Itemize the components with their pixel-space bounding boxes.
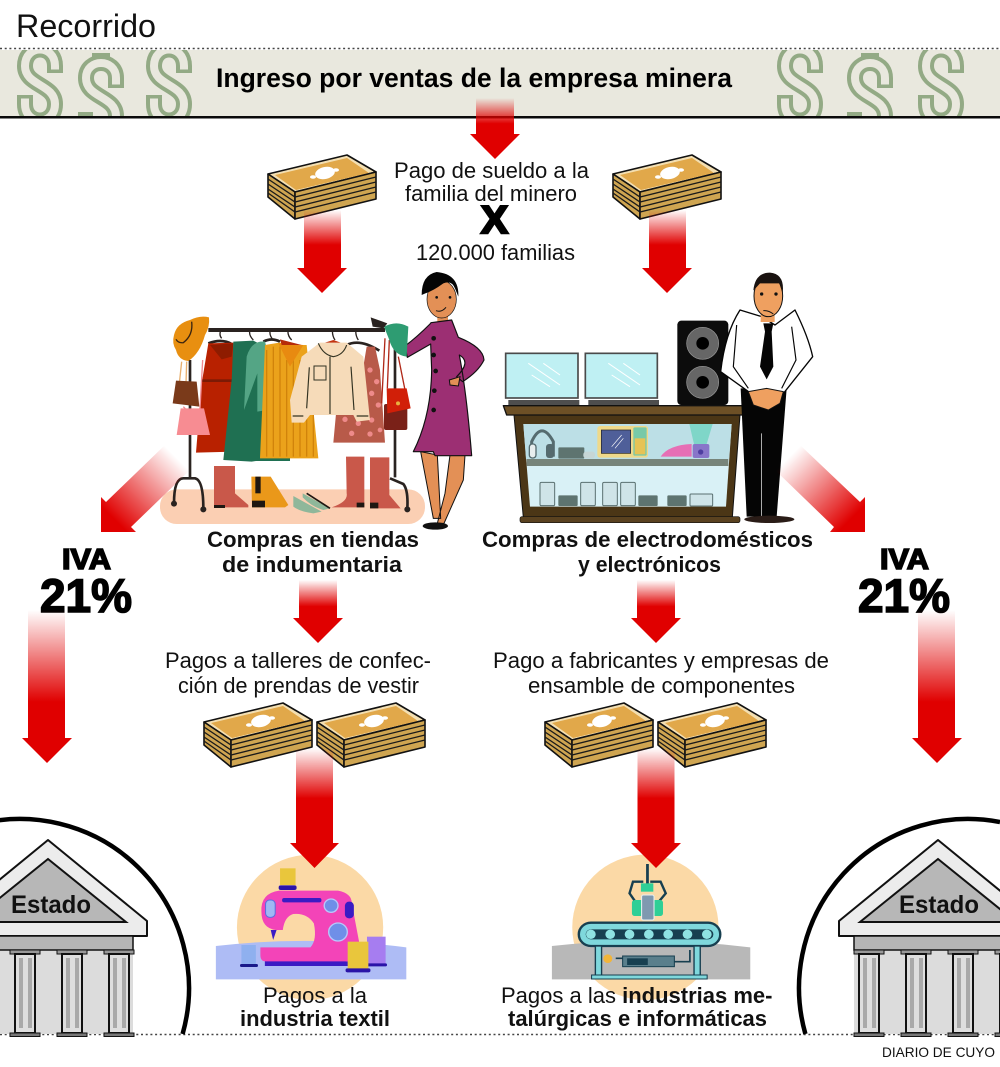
text block: pago de sueldo: familia del minero (405, 181, 577, 206)
credit: DIARIO DE CUYO (882, 1044, 995, 1060)
speaker (677, 321, 728, 405)
label: IVA 21% right: 21% (858, 569, 950, 622)
blender (689, 424, 713, 444)
top dotted divider (0, 48, 1000, 50)
label: industrias metalurgicas: talúrgicas e informáticas (508, 1006, 767, 1031)
arrow: money to electronics (642, 210, 692, 293)
label: compras en tiendas de indumentaria (207, 527, 419, 577)
arrow: workshops to textile (290, 748, 339, 868)
held hat (384, 323, 408, 357)
banner heading: Ingreso por ventas de la empresa minera (216, 63, 733, 93)
boots and shoes (214, 466, 248, 507)
Estado label left: Estado (11, 891, 91, 919)
label: industria textil: Pagos a la (263, 983, 368, 1008)
illustration: clothing rack and shop assistant (160, 272, 484, 530)
label: industrias metalurgicas: Pagos a las industrias me- (501, 983, 772, 1008)
label: compras en tiendas de indumentaria: Compras en tiendas (207, 527, 419, 552)
illustration: electronics counter and salesman (503, 273, 813, 523)
icon: money stack right (613, 155, 721, 219)
hat (173, 317, 209, 361)
red dress (196, 343, 235, 453)
arrow: manufacturers to metallurgy (631, 748, 681, 868)
icon: money stack left (268, 155, 376, 219)
text block: pago de sueldo: Pago de sueldo a la (394, 158, 590, 183)
rack (174, 328, 407, 508)
label: industria textil: industria textil (240, 1006, 390, 1031)
green coat (223, 341, 290, 462)
text: pago a fabricantes: ensamble de componentes (528, 673, 795, 698)
display counter (503, 406, 752, 523)
text: pagos a talleres: ción de prendas de vestir (178, 673, 419, 698)
phones and tablets (540, 482, 713, 506)
label: IVA 21% left: IVA (62, 544, 111, 576)
icon: Estado building left (0, 819, 189, 1036)
label: industrias metalurgicas (501, 983, 772, 1031)
microwave (597, 426, 648, 458)
label: compras de electrodomesticos: Compras de electrodomésticos (482, 527, 813, 552)
text: pagos a talleres: Pagos a talleres de confec- (165, 648, 431, 673)
arrow: clothing to workshops (293, 580, 343, 643)
label: IVA 21% left: 21% (40, 569, 132, 622)
floor (160, 489, 425, 524)
label: IVA 21% right (858, 544, 950, 622)
text: pagos a talleres (165, 648, 431, 698)
arrow: electronics to IVA (775, 445, 865, 532)
bottom dotted divider (0, 1034, 1000, 1036)
headphones (532, 431, 553, 457)
woman (421, 452, 465, 523)
icon: money stacks right pair (545, 703, 766, 767)
illustration: assembly line robot (552, 855, 750, 1000)
label: compras de electrodomesticos (482, 527, 813, 577)
label: IVA 21% left (40, 544, 132, 622)
text: pago a fabricantes (493, 648, 829, 698)
arrow: electronics to manufacturers (631, 580, 681, 643)
Estado label right: Estado (899, 891, 979, 919)
illustration: sewing machine (216, 855, 406, 1000)
text: pago a fabricantes: Pago a fabricantes y empresas de (493, 648, 829, 673)
salesman (721, 273, 813, 523)
label: compras de electrodomesticos: y electrónicos (578, 552, 721, 577)
arrow: IVA right to Estado (912, 610, 962, 763)
cream jacket (290, 343, 370, 423)
icon: money stacks left pair (204, 703, 425, 767)
polka dress (333, 347, 385, 443)
label: IVA 21% right: IVA (880, 544, 929, 576)
arrow: banner to wage (470, 98, 520, 159)
icon: Estado building right (799, 819, 1000, 1036)
label: industria textil (240, 983, 390, 1031)
text block: pago de sueldo: 120.000 familias (416, 240, 575, 265)
icon: dollar signs pattern (17, 50, 964, 116)
multiplication mark: X (481, 199, 508, 242)
arrow: IVA left to Estado (22, 610, 72, 763)
bags (179, 362, 187, 383)
label: compras en tiendas de indumentaria: de indumentaria (222, 552, 403, 577)
text block: pago de sueldo (394, 158, 590, 265)
arrow: clothing to IVA (101, 445, 190, 532)
banner: ingreso por ventas (0, 50, 1000, 118)
laptops (506, 353, 659, 406)
yellow dress (260, 343, 318, 458)
title: Recorrido (16, 8, 156, 44)
arrow: money to clothing (297, 210, 347, 293)
iron (661, 444, 692, 457)
